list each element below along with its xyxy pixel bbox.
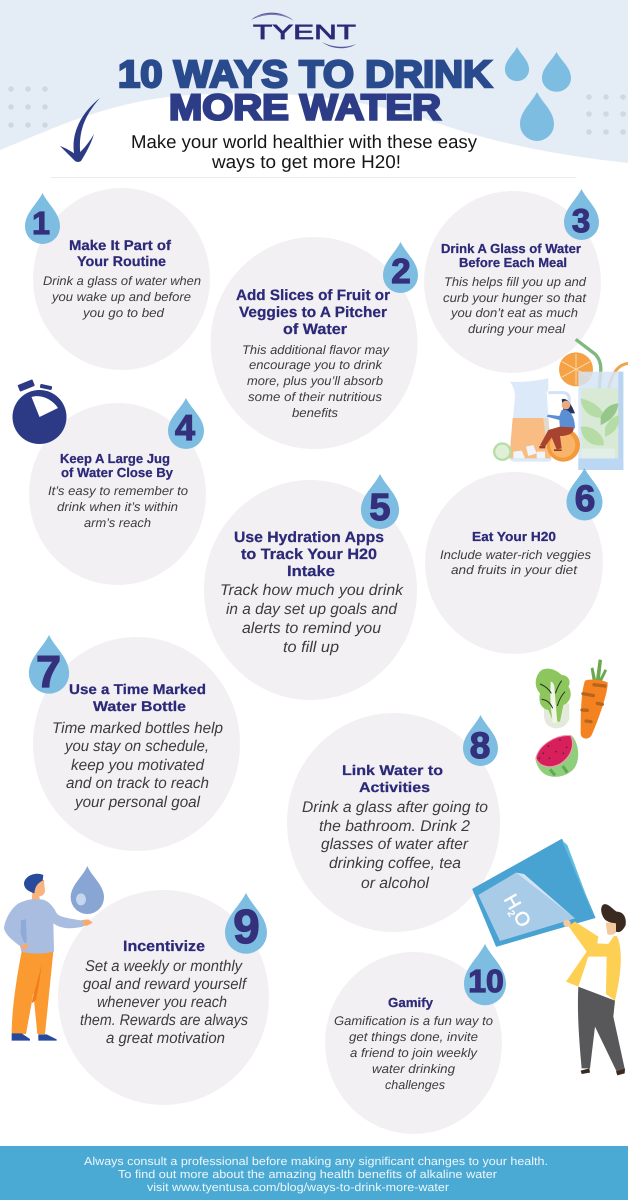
number drop 2: [383, 242, 418, 293]
water drop: [71, 866, 104, 914]
woman: [539, 399, 575, 451]
label: H2O: O: [509, 907, 535, 931]
panel: 3 drink before each meal: [424, 189, 601, 373]
text 9: Set a weekly or monthly: [85, 958, 243, 975]
illustration: vegetables: [535, 659, 608, 777]
glass: [578, 372, 623, 470]
text 2: benefits: [292, 406, 338, 420]
heading 2: of Water: [283, 321, 347, 338]
text 3: [443, 275, 587, 336]
heading 4: Keep A Large Jug: [60, 451, 170, 466]
text 1: Drink a glass of water when: [43, 274, 201, 288]
heading 7: [69, 681, 206, 714]
footer text: [84, 1156, 548, 1194]
text 5: in a day set up goals and: [226, 601, 398, 618]
text 5: to fill up: [283, 639, 339, 656]
straw green: [576, 339, 601, 422]
man: [4, 874, 93, 1041]
panel: 2 add slices of fruit: [210, 237, 418, 449]
number drop 6: 6: [575, 478, 595, 519]
lettuce: [536, 669, 571, 728]
text 9: whenever you reach: [97, 994, 227, 1011]
text 2: This additional flavor may: [242, 343, 390, 357]
text 4: arm’s reach: [84, 516, 151, 530]
person: [563, 904, 626, 1075]
number drop 8: [463, 715, 498, 766]
logo: Tyent: TYENT: [253, 21, 357, 44]
text 4: drink when it’s within: [57, 500, 178, 514]
lime slice: [493, 442, 512, 461]
title: 10 WAYS TO DRINK: [118, 54, 493, 96]
number drop 10: [464, 944, 506, 1005]
text 10: a friend to join weekly: [350, 1046, 478, 1060]
decorative dots left: [8, 86, 48, 128]
text 10: Gamification is a fun way to: [334, 1014, 493, 1028]
label: H2O: H: [500, 890, 525, 913]
text 3: curb your hunger so that: [443, 291, 587, 305]
text 5: [220, 582, 404, 656]
title: [118, 54, 493, 128]
illustration: man with water drop: [4, 866, 104, 1041]
heading 4: [60, 451, 174, 480]
text 7: [52, 720, 223, 811]
subtitle: Make your world healthier with these easy: [131, 131, 478, 152]
panel: 1 make it part of your routine: [25, 188, 210, 370]
text 8: [302, 799, 488, 892]
heading 3: Drink A Glass of Water: [441, 241, 581, 256]
text 10: [334, 1014, 493, 1092]
icon: stopwatch: [12, 379, 66, 444]
heading 1: [69, 237, 171, 269]
number drop 1: [25, 193, 60, 244]
number drop 6: [566, 468, 603, 521]
footer text: Always consult a professional before making any significant changes to your health.: [84, 1156, 548, 1168]
heading 6: Eat Your H20: [472, 529, 556, 544]
heading 7: Water Bottle: [93, 698, 186, 714]
heading 2: Veggies to A Pitcher: [239, 304, 387, 321]
heading 5: [234, 529, 384, 580]
text 2: more, plus you’ll absorb: [247, 374, 383, 388]
number drop 3: [564, 189, 599, 240]
text 3: you don’t eat as much: [450, 306, 578, 320]
text 1: you go to bed: [82, 306, 165, 320]
panel: 5 hydration apps: [204, 474, 417, 700]
heading 5: Intake: [287, 563, 335, 580]
number drop 2: 2: [391, 252, 411, 291]
text 4: [48, 484, 188, 530]
orange slice: [559, 352, 593, 386]
text 9: a great motivation: [106, 1030, 225, 1047]
label: H2O: 2: [506, 909, 517, 918]
orange seat: [547, 428, 580, 462]
heading 8: Activities: [359, 779, 430, 795]
subtitle: ways to get more H20!: [211, 151, 401, 172]
illustration: pitcher, glass and woman: [493, 339, 628, 470]
decorative dots right: [586, 94, 626, 135]
panel: 8 link water to activities: [287, 713, 500, 932]
text 8: the bathroom. Drink 2: [319, 818, 470, 835]
text 8: drinking coffee, tea: [329, 855, 461, 872]
text 9: them. Rewards are always: [80, 1012, 248, 1029]
number drop 9: [225, 893, 267, 954]
text 9: goal and reward yourself: [83, 976, 248, 993]
number drop 9: 9: [233, 901, 260, 954]
icon: header water drops: [505, 47, 571, 141]
text 9: [80, 958, 248, 1047]
number drop 7: [29, 635, 69, 697]
number drop 4: 4: [175, 407, 195, 448]
text 7: Time marked bottles help: [52, 720, 223, 737]
text 3: during your meal: [468, 322, 566, 336]
illustration: person pouring large glass: [473, 840, 626, 1075]
text 7: you stay on schedule,: [64, 738, 209, 755]
heading 8: Link Water to: [342, 762, 443, 778]
heading 10: Gamify: [388, 995, 434, 1010]
text 5: alerts to remind you: [242, 620, 381, 637]
header wave background: [0, 0, 628, 163]
logo: Tyent: [251, 13, 357, 48]
heading 8: [342, 762, 443, 795]
heading 3: [441, 241, 581, 270]
heading 5: Use Hydration Apps: [234, 529, 384, 546]
text 10: water drinking: [372, 1062, 455, 1076]
footer text: visit www.tyentusa.com/blog/ways-to-drink-more-water: [147, 1182, 449, 1194]
panel: 4 keep a large jug: [29, 398, 206, 585]
text 2: some of their nutritious: [248, 390, 382, 404]
straw orange: [601, 363, 628, 417]
number drop 8: 8: [470, 725, 490, 766]
number drop 4: [168, 398, 204, 449]
text 8: or alcohol: [361, 875, 430, 892]
carrot: [581, 659, 608, 739]
heading 5: to Track Your H20: [241, 546, 377, 563]
heading 4: of Water Close By: [61, 465, 174, 480]
heading 9: Incentivize: [123, 938, 205, 955]
text 1: [43, 274, 201, 320]
text 8: Drink a glass after going to: [302, 799, 488, 816]
text 6: Include water-rich veggies: [440, 548, 591, 562]
number drop 5: 5: [369, 487, 391, 529]
text 8: glasses of water after: [321, 836, 469, 853]
number drop 7: 7: [36, 646, 61, 697]
footer text: To find out more about the amazing health benefits of alkaline water: [118, 1169, 497, 1181]
text 7: and on track to reach: [66, 775, 209, 792]
text 10: challenges: [385, 1078, 445, 1092]
watermelon: [535, 735, 578, 777]
text 4: It’s easy to remember to: [48, 484, 188, 498]
heading 1: Your Routine: [77, 253, 166, 269]
panel: 6 eat your h20: [425, 472, 603, 654]
subtitle: [131, 131, 478, 172]
text 7: keep you motivated: [71, 757, 205, 774]
text 2: [242, 343, 390, 420]
number drop 1: 1: [32, 205, 50, 241]
text 6: [440, 548, 591, 577]
panel: 7 time marked bottle: [29, 635, 240, 851]
icon: curved arrow: [60, 98, 100, 162]
large glass: [473, 840, 594, 946]
pitcher: [509, 378, 569, 462]
number drop 5: [361, 474, 399, 529]
number drop 3: 3: [572, 202, 590, 239]
heading 2: [236, 287, 390, 338]
heading 7: Use a Time Marked: [69, 681, 206, 697]
text 6: and fruits in your diet: [451, 563, 578, 577]
text 7: your personal goal: [74, 794, 201, 811]
panel: 9 incentivize: [58, 890, 269, 1105]
footer band: [0, 1146, 628, 1200]
heading 3: Before Each Meal: [459, 255, 567, 270]
text 3: This helps fill you up and: [444, 275, 587, 289]
text 10: get things done, invite: [349, 1030, 478, 1044]
heading 2: Add Slices of Fruit or: [236, 287, 390, 304]
panel: 10 gamify: [325, 944, 506, 1134]
text 2: encourage you to drink: [249, 358, 383, 372]
title: MORE WATER: [169, 86, 441, 128]
heading 1: Make It Part of: [69, 237, 171, 253]
number drop 10: 10: [468, 963, 504, 999]
text 5: Track how much you drink: [220, 582, 404, 599]
text 1: you wake up and before: [51, 290, 191, 304]
